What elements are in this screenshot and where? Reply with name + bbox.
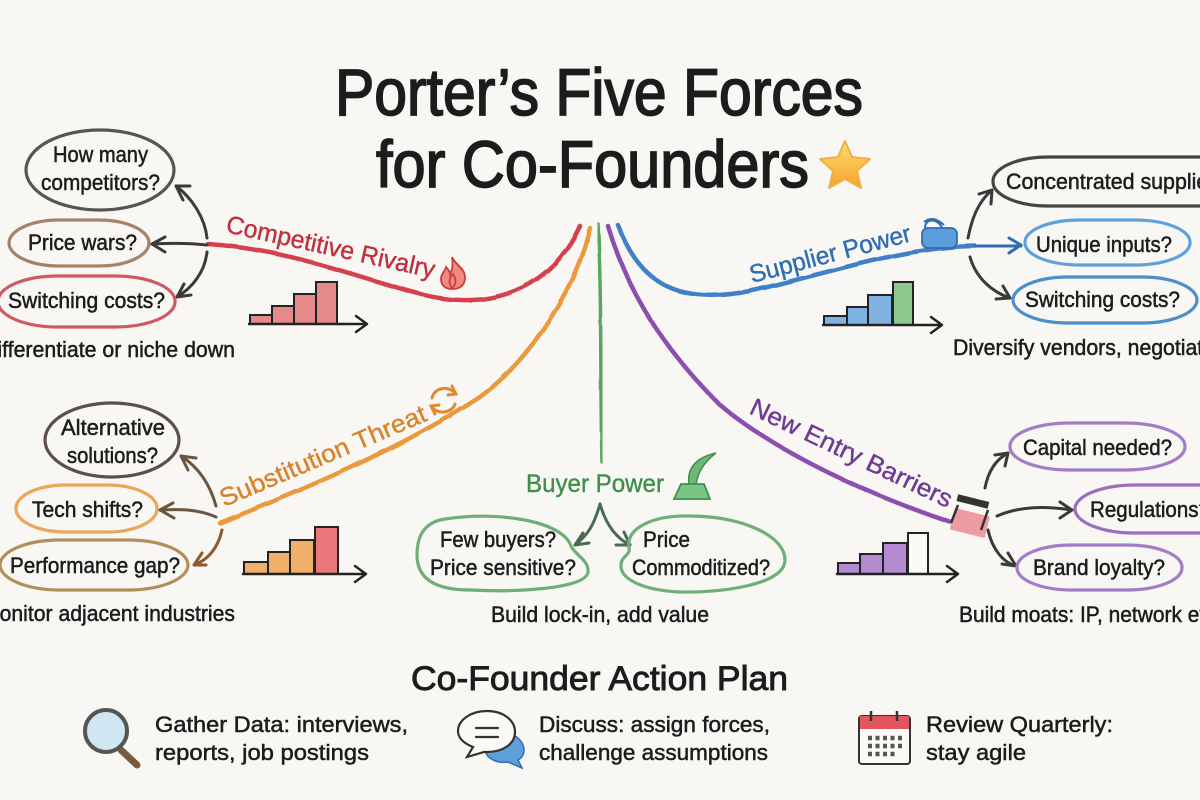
bubble: capital needed — [1010, 423, 1185, 470]
action: review quarterly — [926, 712, 1113, 765]
bubble: capital needed: Capital needed? — [1023, 435, 1172, 460]
bubble: price commoditized — [621, 516, 785, 592]
bubble: performance gap: Performance gap? — [10, 553, 180, 578]
icon: calendar — [859, 711, 910, 764]
action: discuss — [539, 712, 770, 765]
icon: barrier gate — [950, 494, 990, 538]
action: discuss: Discuss: assign forces, — [539, 712, 770, 737]
bubble: switching costs supplier: Switching costs? — [1025, 287, 1180, 312]
rivalry branch curve — [208, 226, 580, 300]
supplier label: Supplier Power — [746, 220, 914, 289]
supplier branch curve — [618, 225, 975, 295]
title: for Co-Founders — [376, 127, 809, 201]
title — [335, 55, 863, 201]
title: Porter’s Five Forces — [335, 55, 863, 129]
panel: action plan — [85, 660, 1113, 768]
icon: magnifier — [85, 710, 137, 765]
rivalry label: Competitive Rivalry — [224, 211, 438, 284]
substitution branch curve — [220, 228, 590, 523]
bubble: brand loyalty: Brand loyalty? — [1033, 555, 1165, 580]
substitution label: Substitution Threat — [215, 400, 431, 513]
bubble: tech shifts — [16, 485, 157, 532]
action: review quarterly: Review Quarterly: — [926, 712, 1113, 737]
buyer arrows — [575, 504, 630, 545]
bubble: how many competitors: competitors? — [41, 170, 160, 195]
bubble: brand loyalty — [1017, 545, 1182, 590]
panel: supplier power — [618, 157, 1200, 360]
rivalry arrows — [152, 186, 207, 297]
bubble: unique inputs: Unique inputs? — [1036, 232, 1172, 257]
icon: refresh arrows — [431, 386, 456, 414]
bubble: switching costs: Switching costs? — [8, 288, 165, 313]
supplier arrows — [968, 190, 1021, 299]
panel: substitution threat — [0, 228, 590, 626]
bubble: price commoditized: Price — [643, 527, 690, 552]
bar chart: supplier — [823, 282, 942, 333]
bubble: switching costs supplier — [1013, 277, 1197, 323]
panel: buyer power — [417, 224, 785, 627]
bar chart: rivalry — [249, 282, 367, 332]
bubble: switching costs — [0, 276, 175, 327]
icon: flame — [441, 257, 465, 289]
bubble: unique inputs — [1025, 220, 1190, 265]
buyer label: Buyer Power — [526, 470, 664, 498]
bar chart: entry — [837, 533, 958, 582]
panel: new entry barriers — [608, 226, 1200, 627]
icon: lever — [674, 453, 716, 499]
bubble: alternative solutions: Alternative — [61, 415, 165, 440]
bubble: regulations — [1075, 485, 1200, 533]
entry branch curve — [608, 226, 950, 522]
panel: competitive rivalry — [0, 130, 580, 362]
bubble: price wars — [9, 220, 149, 266]
bubble: how many competitors — [26, 130, 174, 210]
action: gather data: reports, job postings — [155, 740, 369, 765]
bubble: price commoditized: Commoditized? — [632, 555, 770, 580]
icon: briefcase — [922, 219, 957, 248]
action: review quarterly: stay agile — [926, 740, 1026, 765]
bubble: tech shifts: Tech shifts? — [32, 497, 143, 522]
icon: star — [820, 141, 870, 188]
bubble: how many competitors: How many — [53, 142, 148, 167]
icon: chat bubbles — [458, 711, 524, 768]
bubble: few buyers: Few buyers? — [440, 527, 556, 552]
entry label: New Entry Barriers — [745, 393, 957, 514]
bubble: performance gap — [0, 540, 188, 590]
bar chart: substitution — [243, 527, 366, 582]
bubble: few buyers — [417, 516, 588, 591]
action: discuss: challenge assumptions — [539, 740, 768, 765]
bubble: concentrated suppliers — [993, 157, 1200, 206]
substitution arrows — [160, 456, 222, 565]
bubble: price wars: Price wars? — [28, 230, 137, 255]
action: gather data: Gather Data: interviews, — [155, 712, 408, 737]
action plan heading: Co-Founder Action Plan — [411, 660, 788, 698]
bubble: alternative solutions — [45, 403, 179, 477]
action: gather data — [155, 712, 408, 765]
buyer branch line — [598, 224, 602, 462]
entry arrows — [985, 453, 1072, 566]
buyer takeaway: Build lock-in, add value — [491, 602, 709, 627]
bubble: alternative solutions: solutions? — [67, 443, 158, 468]
bubble: few buyers: Price sensitive? — [430, 555, 576, 580]
